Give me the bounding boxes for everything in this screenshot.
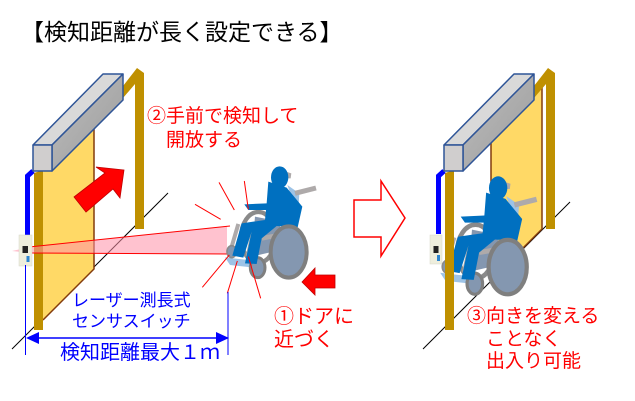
sensor label: センサスイッチ [72,307,191,332]
step 3 label: 出入り可能 [486,346,581,373]
title: 【検知距離が長く設定できる】 [21,13,343,47]
transition arrow [354,181,405,256]
open yellow door [491,78,542,280]
laser sensor switch right [430,235,442,264]
yellow door curtain [43,125,94,320]
step 3 label: ことなく [486,324,561,351]
left post [34,170,43,330]
floor line [423,202,570,349]
blue cable [438,171,444,234]
wheelchair user left [225,166,316,278]
right door assembly [423,68,570,349]
step 2 label: 開放する [166,125,242,152]
left door edge [490,141,492,280]
step 2 label: ②手前で検知して [147,101,298,128]
wheelchair user right [440,176,537,294]
step 1 label: ①ドアに [274,300,354,329]
left door assembly [12,68,168,349]
approach arrow [302,268,335,295]
right post [534,68,555,229]
detection burst lines [195,181,261,298]
door edge [43,125,94,320]
right door edge [522,85,542,249]
front post overlap [445,225,454,330]
left post [445,170,454,330]
step 1 label: 近づく [274,323,334,352]
detection distance dimension [26,265,229,355]
right post [123,68,144,229]
blue cable [28,171,33,236]
step 1 label [274,300,354,352]
sensor label [72,286,191,332]
sensor label: レーザー測長式 [72,286,191,311]
door opening arrow [74,167,124,212]
step 3 label: ③向きを変える [467,301,599,328]
door header box [33,74,123,171]
floor line [12,193,168,349]
distance label: 検知距離最大１ｍ [60,336,220,365]
door header box [444,74,534,171]
laser sensor switch left [19,235,32,266]
step 2 label [147,101,298,152]
laser beam [12,226,230,254]
step 3 label [467,301,599,373]
